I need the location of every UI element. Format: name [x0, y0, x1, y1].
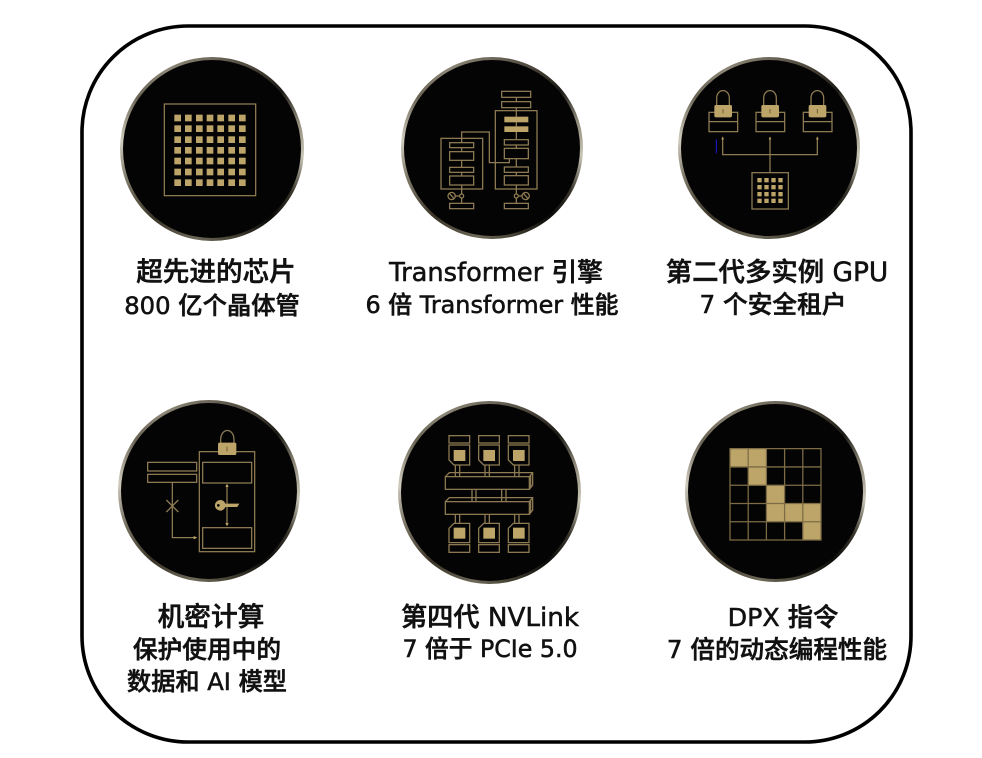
caption: advanced chip: 超先进的芯片 [136, 257, 296, 288]
caption: multi-instance GPU: 第二代多实例 GPU [666, 257, 888, 288]
icon: NVLink interconnect [398, 401, 581, 584]
icon: transformer engine diagram [401, 57, 583, 239]
caption: confidential computing: 机密计算 [158, 602, 264, 633]
caption: advanced chip [124, 257, 300, 320]
icon: DPX instructions matrix [685, 401, 866, 582]
caption: confidential computing: 保护使用中的 [133, 635, 281, 664]
caption: multi-instance GPU [666, 257, 888, 319]
caption: transformer engine [365, 258, 618, 319]
caption: advanced chip: 800 亿个晶体管 [124, 291, 300, 320]
caption: transformer engine: Transformer 引擎 [389, 258, 603, 288]
icon: confidential computing with lock and key [118, 400, 300, 582]
icon: multi-instance GPU with three locks [678, 57, 860, 239]
caption: DPX instructions: 7 倍的动态编程性能 [667, 635, 887, 664]
caption: DPX instructions: DPX 指令 [728, 603, 838, 632]
caption: transformer engine: 6 倍 Transformer 性能 [365, 291, 618, 319]
icon: chip with 80 billion transistors [120, 57, 304, 241]
caption: multi-instance GPU: 7 个安全租户 [700, 290, 846, 319]
caption: NVLink: 第四代 NVLink [401, 603, 579, 633]
caption: NVLink: 7 倍于 PCIe 5.0 [402, 635, 578, 663]
caption: confidential computing: 数据和 AI 模型 [127, 668, 287, 696]
